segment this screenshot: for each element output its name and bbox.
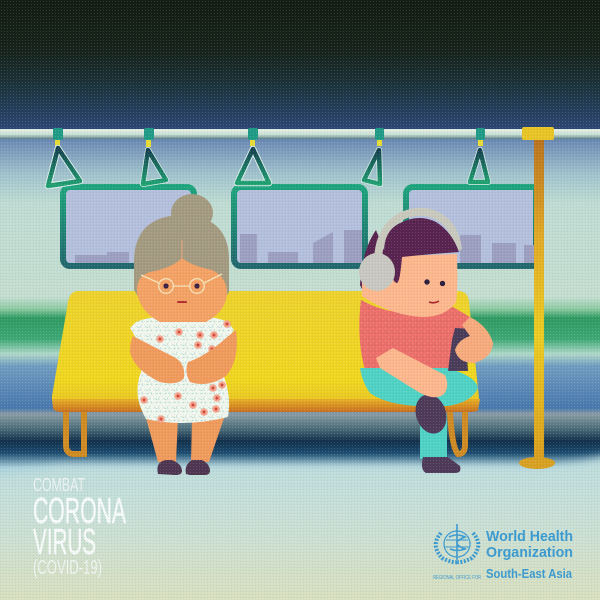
ear cup (359, 253, 395, 291)
eyes (163, 283, 169, 289)
hanging strap 3 (237, 128, 269, 183)
window: right (406, 187, 536, 266)
shoe (422, 457, 460, 473)
young man with headphones (359, 212, 493, 473)
hair bun (171, 194, 213, 232)
CORONA: CORONA (33, 490, 126, 531)
yellow pole (519, 127, 555, 469)
mouth (177, 301, 187, 303)
COMBAT: COMBAT (33, 475, 85, 495)
far arm and hand (455, 317, 493, 363)
near arm (376, 348, 447, 397)
carriage floor (0, 452, 600, 600)
face (362, 254, 457, 317)
(COVID-19): (COVID-19) (33, 557, 102, 579)
eyes (424, 279, 430, 285)
regional office label: REGIONAL OFFICE FOR (433, 575, 481, 581)
face (137, 258, 227, 322)
legs (146, 418, 224, 462)
bench legs (66, 408, 465, 454)
floral dress (130, 317, 234, 423)
arms and hands (130, 330, 237, 384)
hanging strap 5 (470, 128, 488, 182)
far ear cup (455, 264, 458, 288)
hair (134, 215, 229, 298)
glasses (141, 274, 222, 293)
headband (378, 212, 458, 258)
elderly woman (130, 194, 237, 475)
Organization: Organization (486, 544, 573, 561)
head (134, 194, 229, 322)
crossed leg shoe (411, 390, 451, 438)
back hair (360, 230, 392, 298)
yellow bench (52, 291, 480, 412)
grab rail (0, 129, 600, 139)
window: centre (234, 187, 365, 266)
VIRUS: VIRUS (33, 521, 96, 562)
head (359, 212, 459, 317)
mouth (429, 301, 439, 303)
World Health: World Health (486, 528, 573, 545)
standing leg (420, 415, 447, 459)
shirt (359, 300, 478, 374)
hanging strap 1 (48, 128, 80, 186)
WHO logo (433, 524, 573, 581)
WHO emblem (436, 524, 478, 562)
crossed leg (360, 368, 478, 406)
campaign title (33, 475, 126, 579)
hanging strap 4 (364, 128, 384, 184)
hanging strap 2 (143, 128, 166, 184)
hair (384, 218, 459, 283)
South-East Asia: South-East Asia (486, 566, 573, 581)
window: left (63, 187, 194, 266)
hair parting (181, 240, 183, 258)
phone (448, 328, 476, 371)
shoes (157, 460, 210, 475)
